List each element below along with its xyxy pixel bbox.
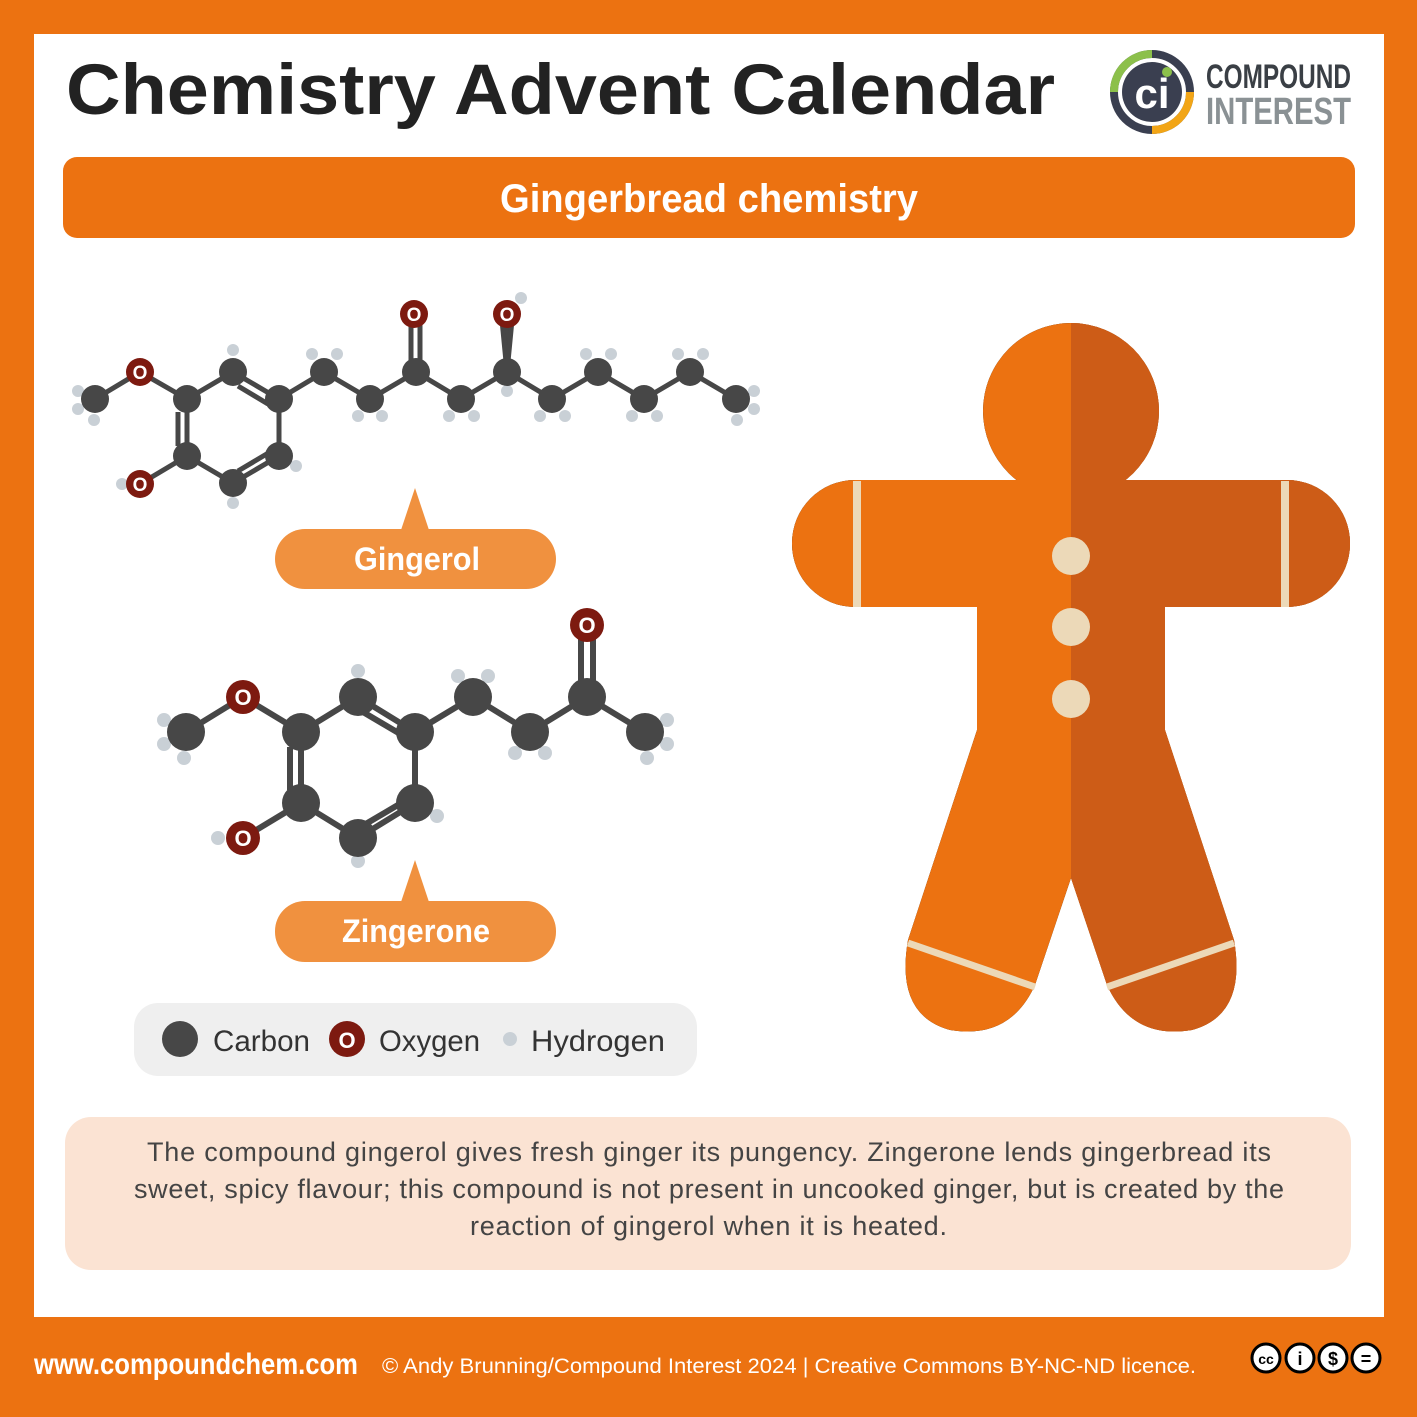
footer: www.compoundchem.com (33, 1348, 358, 1381)
header bar: Gingerbread chemistry (500, 177, 919, 221)
footer: © Andy Brunning/Compound Interest 2024 | Creative Commons BY-NC-ND licence. (382, 1355, 1196, 1378)
molecule: zingerone (186, 625, 645, 838)
cc licence icons: cc (1258, 1351, 1274, 1367)
description box: The compound gingerol gives fresh ginger its pungency. Zingerone lends gingerbread its (147, 1137, 1271, 1167)
label: gingerol: Gingerol (354, 541, 480, 577)
description box: sweet, spicy flavour; this compound is not present in uncooked ginger, but is created by the (134, 1174, 1284, 1204)
description box: reaction of gingerol when it is heated. (470, 1211, 947, 1241)
label: zingerone (275, 860, 556, 962)
header bar (63, 157, 1355, 238)
legend: Carbon (213, 1025, 310, 1058)
legend: O (338, 1028, 356, 1053)
footer (33, 1348, 1196, 1381)
molecule: gingerol (95, 314, 736, 484)
logo: compound interest: COMPOUND (1206, 58, 1351, 96)
title: Chemistry Advent Calendar (66, 51, 1055, 130)
cc licence icons: $ (1328, 1349, 1338, 1369)
logo: compound interest: ci (1134, 70, 1170, 117)
logo: compound interest: INTEREST (1206, 91, 1351, 133)
label: zingerone: Zingerone (342, 913, 490, 949)
legend: Hydrogen (531, 1025, 665, 1058)
cc licence icons: = (1361, 1349, 1371, 1369)
legend (134, 1003, 697, 1076)
label: gingerol (275, 488, 556, 589)
cc licence icons: i (1297, 1349, 1303, 1369)
description box (65, 1117, 1351, 1270)
legend: Oxygen (379, 1025, 480, 1058)
cc licence icons (1252, 1344, 1380, 1372)
gingerbread man (792, 323, 1350, 1032)
logo: compound interest (1114, 54, 1351, 133)
